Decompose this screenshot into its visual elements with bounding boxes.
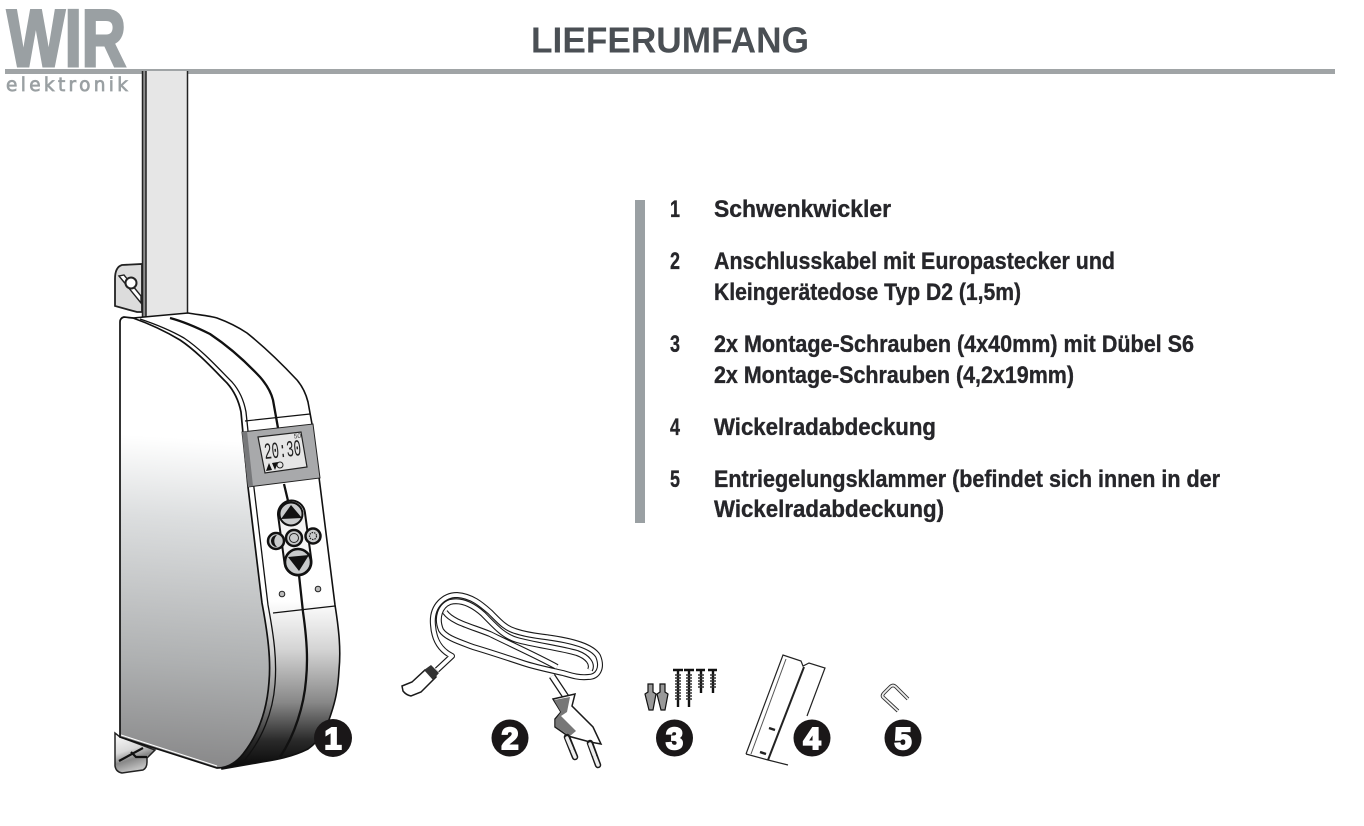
list item 3 [670,331,1194,389]
up button [280,502,302,526]
header rule [5,69,1335,74]
cover slots [760,728,775,754]
belt strip [142,71,188,319]
list item 1: Schwenkwickler [714,196,891,223]
badge 4 [794,720,830,756]
list item 5 [670,466,1220,523]
list item 2: Kleingerätedose Typ D2 (1,5m) [714,279,1021,306]
LCD screen [258,432,307,473]
housing left face [120,317,270,768]
LCD time: 20:30 [263,436,303,466]
badge 2: 2 [501,721,519,756]
cable tail to plug [552,676,566,697]
logo subtitle: elektronik [6,75,128,96]
down button [285,549,311,575]
bottom mounting bracket [115,733,155,773]
badge 3 [656,720,693,756]
item 3: wall anchors and screws [645,670,717,710]
long screws [673,670,694,707]
list item 2 [670,248,1115,306]
logo: WIR elektronik [6,0,128,96]
moon button [268,533,284,549]
badge 1 [314,719,352,757]
list accent bar [635,200,645,523]
badge 5: 5 [894,721,912,756]
list item 3: 2x Montage-Schrauben (4x40mm) mit Dübel S6 [714,331,1194,358]
top mounting bracket [115,264,142,312]
badge 2 [492,720,528,756]
title: LIEFERUMFANG [531,20,809,60]
display band [242,424,320,487]
item 2: power cable [402,595,601,765]
wall anchors [645,684,668,710]
panel seam lines [245,414,335,613]
LCD small label: 50 [294,433,302,440]
housing inner edge line [140,319,276,762]
item 5: release clip [882,686,908,711]
control buttons [268,502,320,575]
cable coil outline [433,595,600,677]
housing centre groove [170,318,307,757]
badge 5 [884,720,922,756]
panel: parts list [635,196,1220,523]
list item 4: 4 [670,414,680,441]
badge 4: 4 [803,721,821,756]
LCD status icons [266,462,283,471]
list item 3: 2x Montage-Schrauben (4,2x19mm) [714,362,1074,389]
list item 4: Wickelradabdeckung [714,414,936,441]
list item 5: 5 [670,466,680,493]
sun button [306,528,320,544]
badge 3: 3 [666,721,683,756]
short screws [696,670,717,693]
euro plug [553,694,601,765]
item 1: Schwenkwickler [115,71,340,773]
clock button [286,530,302,546]
appliance connector [402,665,439,696]
list item 5: Entriegelungsklammer (befindet sich innen in der [714,466,1220,493]
screw holes [279,586,321,597]
badge 1: 1 [324,721,342,756]
list item 2: 2 [670,248,680,275]
item 4: winding wheel cover [746,655,825,765]
list item 1: 1 [670,196,680,223]
list item 2: Anschlusskabel mit Europastecker und [714,248,1115,275]
bottom edge highlight [121,735,217,766]
list item 5: Wickelradabdeckung) [714,496,944,523]
plug pins [567,737,598,765]
cable coil fill [433,595,600,677]
list item 3: 3 [670,331,680,358]
housing right band [133,313,340,769]
